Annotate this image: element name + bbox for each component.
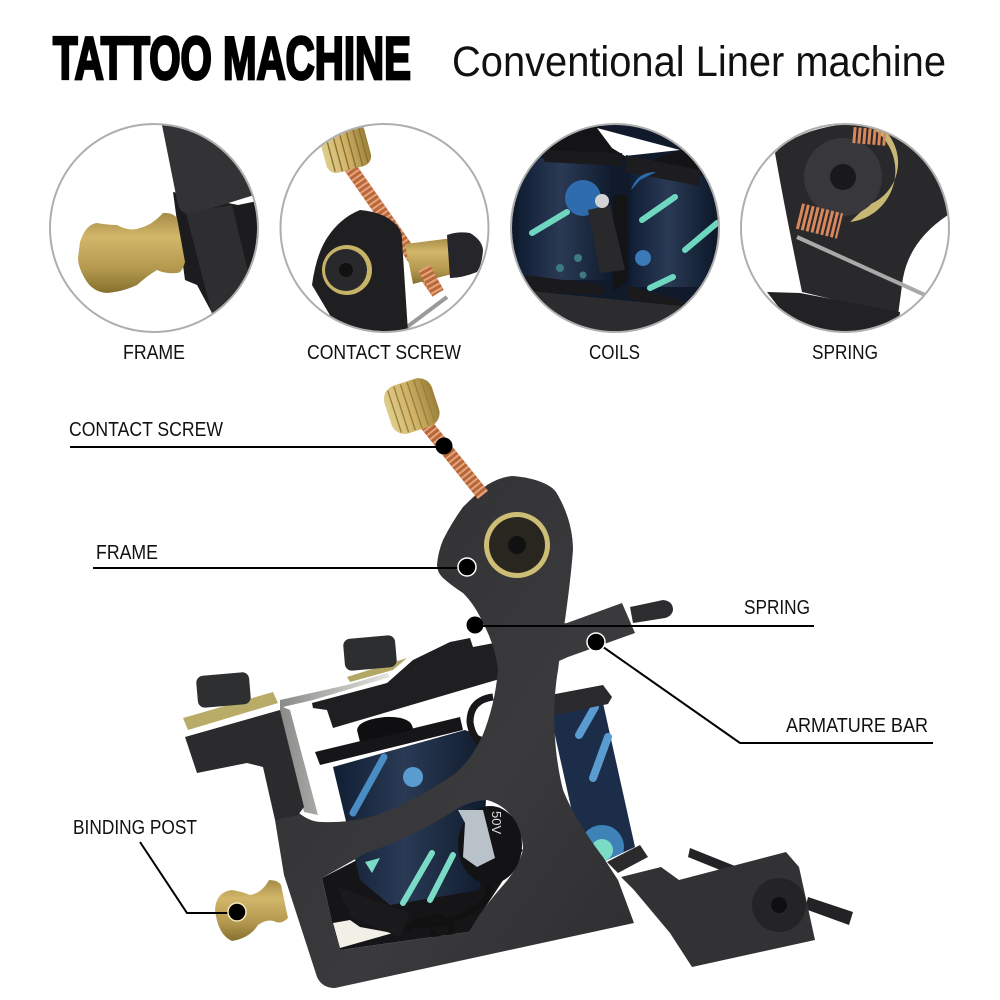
callout: spring: SPRING: [744, 597, 810, 619]
contact screw: [380, 375, 483, 495]
binding post: [215, 880, 288, 941]
detail circle: frame: [50, 124, 270, 332]
hinge block: [621, 852, 815, 967]
circle label: FRAME: FRAME: [123, 342, 185, 364]
detail circle: coils: [510, 123, 720, 333]
front coil: [315, 717, 490, 939]
callout: frame: [93, 542, 476, 576]
callout: binding post: BINDING POST: [73, 817, 197, 839]
white gap: [333, 920, 393, 948]
hole backing: [322, 807, 523, 950]
frame: [275, 476, 634, 988]
callout: frame: FRAME: [96, 542, 158, 564]
callout: spring: [466, 597, 814, 634]
callout: contact screw: [69, 419, 452, 454]
title: TATTOO MACHINE: TATTOO MACHINE: [53, 25, 411, 92]
capacitor and wires: [458, 806, 522, 884]
frame upper-left block: [185, 710, 304, 820]
rear coil: [550, 685, 648, 873]
detail circle: contact screw: [280, 120, 488, 332]
binding post screw: [183, 672, 278, 730]
capacitor and wires: 50V: [489, 811, 504, 834]
frame screw: [484, 512, 550, 578]
armature bar: [312, 600, 673, 728]
rear rods: [688, 848, 853, 925]
subtitle: Conventional Liner machine: Conventional Liner machine: [452, 38, 946, 86]
circle label: SPRING: SPRING: [812, 342, 878, 364]
circle label: COILS: COILS: [589, 342, 640, 364]
wire loop: [470, 697, 493, 745]
circle label: CONTACT SCREW: CONTACT SCREW: [307, 342, 461, 364]
tattoo machine illustration: [183, 375, 853, 988]
callout: contact screw: CONTACT SCREW: [69, 419, 223, 441]
callout: binding post: [73, 817, 246, 921]
steel spring strip: [280, 673, 390, 815]
callout: armature bar: ARMATURE BAR: [786, 715, 928, 737]
callout: armature bar: [587, 633, 933, 743]
armature screw: [343, 635, 407, 682]
detail circle: spring: [741, 117, 950, 335]
